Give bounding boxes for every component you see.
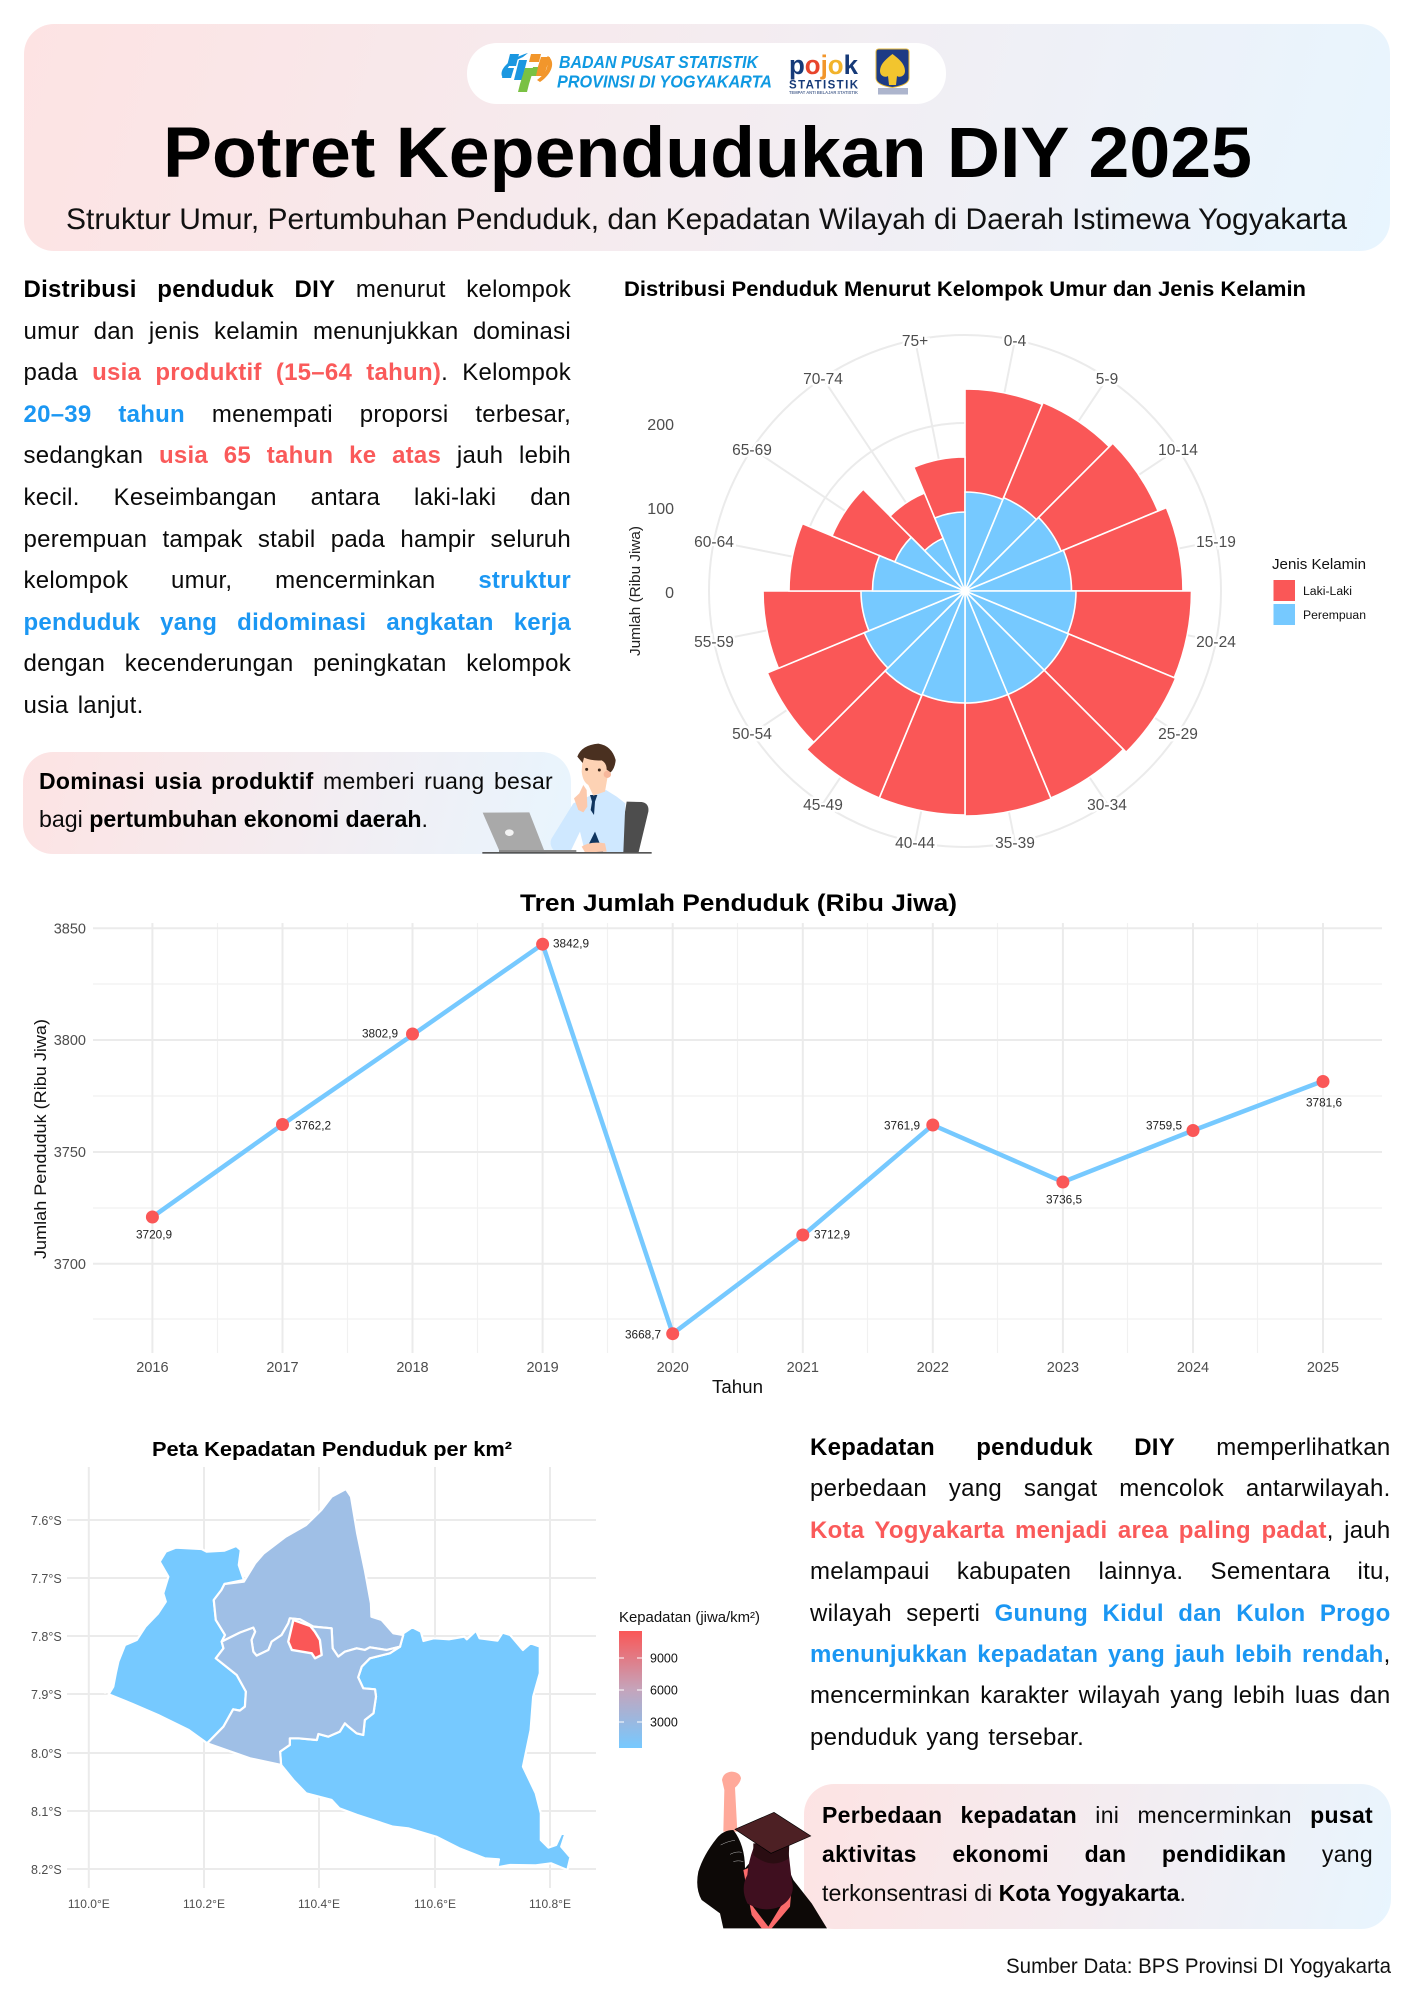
axis titles: Jumlah Penduduk (Ribu Jiwa) <box>31 1019 50 1259</box>
header panel <box>24 24 1390 251</box>
x axis labels <box>136 1360 1339 1376</box>
data labels: 3759,5 <box>1146 1118 1183 1132</box>
text block: age distribution: pada usia produktif (15–64 tahun). Kelompok <box>24 359 571 386</box>
y axis labels <box>54 922 86 1273</box>
subtitle: Struktur Umur, Pertumbuhan Penduduk, dan Kepadatan Wilayah di Daerah Istimewa Yogyakarta <box>66 203 1347 236</box>
age group labels: 55-59 <box>694 634 734 651</box>
longitude labels: 110.2°E <box>183 1897 225 1911</box>
callout: density meaning: terkonsentrasi di Kota Yogyakarta. <box>822 1880 1186 1906</box>
illustration: graduate <box>697 1772 827 1928</box>
text block: age distribution: penduduk yang didominasi angkatan kerja <box>24 609 571 636</box>
age group labels: 45-49 <box>803 797 843 814</box>
x axis labels: 2016 <box>136 1360 169 1376</box>
age group labels: 15-19 <box>1196 534 1236 551</box>
logo: pojok statistik: STATISTIK <box>789 80 859 92</box>
text block: density: penduduk yang tersebar. <box>810 1724 1084 1751</box>
text block: density: wilayah seperti Gunung Kidul dan Kulon Progo <box>810 1600 1390 1627</box>
text block: density: Kepadatan penduduk DIY memperlihatkan <box>810 1434 1390 1461</box>
x axis labels: 2019 <box>526 1360 559 1376</box>
text block: density: perbedaan yang sangat mencolok antarwilayah. <box>810 1475 1390 1502</box>
age group labels: 65-69 <box>732 442 772 459</box>
axis titles: Tahun <box>712 1377 763 1397</box>
radial axis <box>627 417 674 656</box>
callout: productive age <box>23 752 571 854</box>
data labels: 3802,9 <box>362 1026 398 1040</box>
data labels: 3712,9 <box>814 1228 850 1242</box>
y axis labels: 3800 <box>54 1033 86 1049</box>
logo: pojok statistik: pojok <box>789 50 859 80</box>
line series <box>152 944 1323 1334</box>
logo text: BPS <box>557 52 772 92</box>
region: Gunung Kidul <box>280 1627 570 1870</box>
radial axis: Jumlah (Ribu Jiwa) <box>627 526 644 656</box>
age group labels: 30-34 <box>1087 797 1127 814</box>
text block: age distribution: dengan kecenderungan peningkatan kelompok <box>24 650 571 677</box>
longitude labels: 110.4°E <box>298 1897 340 1911</box>
data labels: 3781,6 <box>1306 1096 1343 1110</box>
x axis labels: 2023 <box>1047 1360 1079 1376</box>
latitude labels: 8.0°S <box>31 1747 62 1761</box>
longitude labels: 110.6°E <box>414 1897 456 1911</box>
callout: density meaning: Perbedaan kepadatan ini mencerminkan pusat <box>822 1802 1373 1828</box>
region: Kota Yogyakarta <box>288 1620 322 1658</box>
text block: density: mencerminkan karakter wilayah yang lebih luas dan <box>810 1682 1390 1709</box>
logo strip <box>467 43 946 104</box>
polar grid <box>709 335 1221 847</box>
axis titles <box>31 1019 763 1397</box>
age group labels: 40-44 <box>895 835 935 852</box>
legend: density <box>619 1610 760 1748</box>
age group labels: 20-24 <box>1196 634 1236 651</box>
text block: density: Kota Yogyakarta menjadi area paling padat, jauh <box>810 1517 1390 1544</box>
logo text: BPS: PROVINSI DI YOGYAKARTA <box>557 72 772 92</box>
age group labels: 60-64 <box>694 534 734 551</box>
age group labels: 50-54 <box>732 726 772 743</box>
grid <box>93 923 1382 1353</box>
age group labels: 75+ <box>902 333 928 350</box>
text block: age distribution: kecil. Keseimbangan antara laki-laki dan <box>24 484 571 511</box>
text block: age distribution: Distribusi penduduk DIY menurut kelompok <box>24 276 571 303</box>
text block: age distribution: perempuan tampak stabil pada hampir seluruh <box>24 526 571 553</box>
latitude labels: 8.1°S <box>31 1805 62 1819</box>
age group labels: 70-74 <box>803 371 843 388</box>
map title: Peta Kepadatan Penduduk per km² <box>152 1438 512 1461</box>
title: Potret Kependudukan DIY 2025 <box>163 114 1252 193</box>
data labels: 3762,2 <box>295 1118 331 1132</box>
text block: age distribution: kelompok umur, mencerminkan struktur <box>24 567 571 594</box>
latitude labels <box>31 1514 62 1877</box>
data labels: 3720,9 <box>136 1228 172 1242</box>
legend: gender <box>1272 557 1366 625</box>
age group labels: 25-29 <box>1158 726 1198 743</box>
latitude labels: 7.8°S <box>31 1630 62 1644</box>
age group labels: 35-39 <box>995 835 1035 852</box>
legend: density: 6000 <box>650 1684 678 1698</box>
latitude labels: 7.9°S <box>31 1688 62 1702</box>
chart: population trend <box>31 890 1382 1397</box>
chart: density map <box>31 1438 760 1911</box>
legend: gender: Laki-Laki <box>1303 586 1352 598</box>
data labels: 3668,7 <box>625 1328 661 1342</box>
x axis labels: 2022 <box>917 1360 949 1376</box>
age group labels: 5-9 <box>1096 371 1118 388</box>
legend: gender: Perempuan <box>1303 610 1366 622</box>
chart title: Distribusi Penduduk Menurut Kelompok Umur dan Jenis Kelamin <box>624 278 1306 301</box>
age group labels: 0-4 <box>1004 333 1027 350</box>
icon: BPS logo <box>502 53 552 92</box>
data labels: 3761,9 <box>884 1118 920 1132</box>
callout: density meaning <box>804 1784 1391 1929</box>
map regions <box>102 1489 570 1870</box>
logo: pojok statistik <box>789 50 859 95</box>
latitude labels: 7.6°S <box>31 1514 62 1528</box>
text block: density <box>810 1434 1390 1751</box>
logo: pojok statistik: TEMPAT ANTI BELAJAR STATISTIK <box>789 90 858 95</box>
y axis labels: 3850 <box>54 922 86 938</box>
x axis labels: 2021 <box>787 1360 819 1376</box>
data labels: 3842,9 <box>553 936 589 950</box>
legend: density: 9000 <box>650 1652 678 1666</box>
x axis labels: 2024 <box>1177 1360 1209 1376</box>
text block: age distribution: 20–39 tahun menempati proporsi terbesar, <box>24 401 571 428</box>
data labels: 3736,5 <box>1046 1192 1083 1206</box>
text block: age distribution: usia lanjut. <box>24 692 144 719</box>
data points <box>146 938 1329 1340</box>
chart: polar distribution <box>624 278 1366 852</box>
radial axis: 0 <box>665 585 674 602</box>
text block: age distribution: sedangkan usia 65 tahun ke atas jauh lebih <box>24 442 571 469</box>
text block: age distribution <box>24 276 571 719</box>
callout: productive age: bagi pertumbuhan ekonomi daerah. <box>39 806 428 832</box>
callout: productive age: Dominasi usia produktif memberi ruang besar <box>39 768 553 794</box>
region: Kulon Progo <box>102 1546 246 1743</box>
region: Bantul <box>207 1618 400 1765</box>
chart title: Tren Jumlah Penduduk (Ribu Jiwa) <box>520 890 957 917</box>
legend: gender: Jenis Kelamin <box>1272 557 1366 573</box>
map grid <box>67 1467 596 1888</box>
logo text: BPS: BADAN PUSAT STATISTIK <box>559 52 759 72</box>
longitude labels <box>68 1897 571 1911</box>
latitude labels: 7.7°S <box>31 1572 62 1586</box>
longitude labels: 110.8°E <box>529 1897 571 1911</box>
x axis labels: 2020 <box>657 1360 689 1376</box>
radial axis: 100 <box>647 501 674 518</box>
legend: density: Kepadatan (jiwa/km²) <box>619 1610 760 1626</box>
latitude labels: 8.2°S <box>31 1863 62 1877</box>
illustration: man at laptop <box>482 744 652 854</box>
y axis labels: 3750 <box>54 1145 86 1161</box>
y axis labels: 3700 <box>54 1257 86 1273</box>
logo: university crest <box>876 49 909 94</box>
legend: density: 3000 <box>650 1716 678 1730</box>
age group labels: 10-14 <box>1158 442 1198 459</box>
data labels <box>136 936 1343 1342</box>
source note: Sumber Data: BPS Provinsi DI Yogyakarta <box>1006 1955 1391 1978</box>
Laki-Laki bars <box>749 389 1198 832</box>
age group labels <box>694 333 1236 852</box>
text block: age distribution: umur dan jenis kelamin menunjukkan dominasi <box>24 318 571 345</box>
text block: density: menunjukkan kepadatan yang jauh lebih rendah, <box>810 1641 1390 1668</box>
longitude labels: 110.0°E <box>68 1897 110 1911</box>
radial axis: 200 <box>647 417 674 434</box>
callout: density meaning: aktivitas ekonomi dan pendidikan yang <box>822 1841 1373 1867</box>
x axis labels: 2017 <box>266 1360 299 1376</box>
text block: density: melampaui kabupaten lainnya. Sementara itu, <box>810 1558 1390 1585</box>
x axis labels: 2018 <box>396 1360 429 1376</box>
region: Sleman <box>214 1489 403 1657</box>
x axis labels: 2025 <box>1307 1360 1339 1376</box>
Perempuan bars <box>854 492 1079 711</box>
